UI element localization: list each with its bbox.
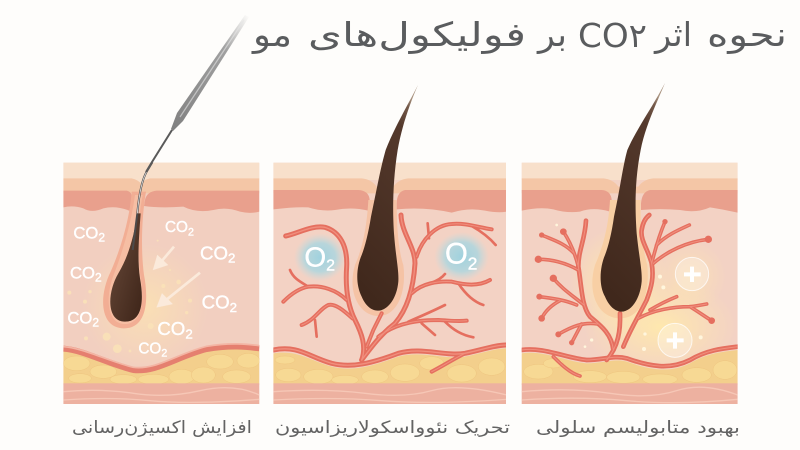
oxygen glow left: O bbox=[304, 242, 326, 273]
CO2 labels: CO bbox=[165, 219, 188, 236]
CO2 labels: CO bbox=[200, 242, 228, 263]
CO2 labels: 2 bbox=[95, 271, 102, 285]
follicle sheath bbox=[352, 200, 404, 316]
title: بر bbox=[536, 15, 567, 54]
CO2 labels: 2 bbox=[92, 316, 99, 330]
CO2 labels: 2 bbox=[98, 231, 105, 245]
title: مو bbox=[251, 15, 292, 54]
CO2 labels: CO bbox=[202, 292, 230, 313]
CO2 labels: CO bbox=[67, 308, 92, 327]
epidermis layer bbox=[522, 163, 738, 180]
title: اثر bbox=[653, 15, 692, 54]
follicle sheath bbox=[592, 200, 648, 318]
microbubbles bbox=[67, 240, 192, 353]
hair bbox=[601, 83, 665, 312]
CO2 labels: CO bbox=[70, 263, 95, 282]
sparkles bbox=[555, 224, 703, 351]
oxygen glow right bbox=[436, 234, 487, 280]
CO2 labels: 2 bbox=[161, 348, 167, 360]
oxygen glow right: O bbox=[445, 237, 468, 270]
epidermis layer bbox=[64, 162, 260, 183]
fat layer bbox=[273, 348, 507, 385]
oxygen glow left: 2 bbox=[326, 258, 335, 275]
oxygen glow left bbox=[296, 235, 344, 280]
CO2 labels: CO bbox=[138, 340, 161, 357]
oxygen glow right: 2 bbox=[468, 253, 477, 273]
title: فولیکول‌های bbox=[308, 15, 526, 54]
caption: cellular metabolism: بهبود متابولیسم سلولی bbox=[536, 418, 740, 438]
CO2 labels bbox=[67, 219, 237, 360]
CO2 labels: 2 bbox=[188, 226, 194, 238]
fat layer bbox=[63, 348, 260, 385]
icon: plus lower bbox=[658, 323, 692, 357]
blood vessels bbox=[273, 215, 507, 372]
caption: neovascularization: تحریک نئوواسکولاریزاسیون bbox=[275, 418, 510, 438]
blood vessels bbox=[522, 215, 738, 376]
CO2 labels: CO bbox=[73, 223, 98, 242]
arrow: diffusion large bbox=[157, 273, 200, 307]
panel: cellular metabolism bbox=[522, 83, 738, 404]
CO2 labels: 2 bbox=[228, 251, 235, 266]
hair bulb bbox=[110, 213, 142, 322]
icon: plus upper bbox=[675, 257, 709, 291]
lower dermis bbox=[522, 383, 738, 404]
glow bbox=[124, 275, 176, 338]
dermis upper band bbox=[273, 190, 507, 213]
dermis upper band bbox=[522, 190, 738, 213]
lower dermis bbox=[273, 383, 507, 404]
follicle sheath bbox=[103, 192, 146, 328]
title: نحوه bbox=[707, 15, 787, 54]
CO2 labels: 2 bbox=[230, 300, 237, 315]
hair bbox=[357, 85, 418, 311]
caption: increased oxygenation: افزایش اکسیژن‌رسانی bbox=[72, 418, 252, 438]
needle tip in follicle bbox=[132, 162, 154, 250]
arrow: diffusion small bbox=[153, 247, 174, 270]
title bbox=[251, 15, 787, 55]
icon: needle bbox=[146, 15, 249, 172]
metabolic glow bbox=[588, 260, 708, 358]
title: CO۲ bbox=[578, 16, 647, 55]
dermis upper band bbox=[63, 191, 259, 213]
lower dermis bbox=[63, 383, 259, 404]
CO2 labels: 2 bbox=[185, 326, 193, 341]
panel: neovascularization bbox=[273, 85, 507, 404]
CO2 labels: CO bbox=[157, 318, 185, 339]
panel: increased oxygenation bbox=[63, 147, 260, 404]
fat layer bbox=[522, 350, 738, 385]
epidermis layer bbox=[273, 163, 506, 180]
basement line bbox=[63, 347, 259, 370]
